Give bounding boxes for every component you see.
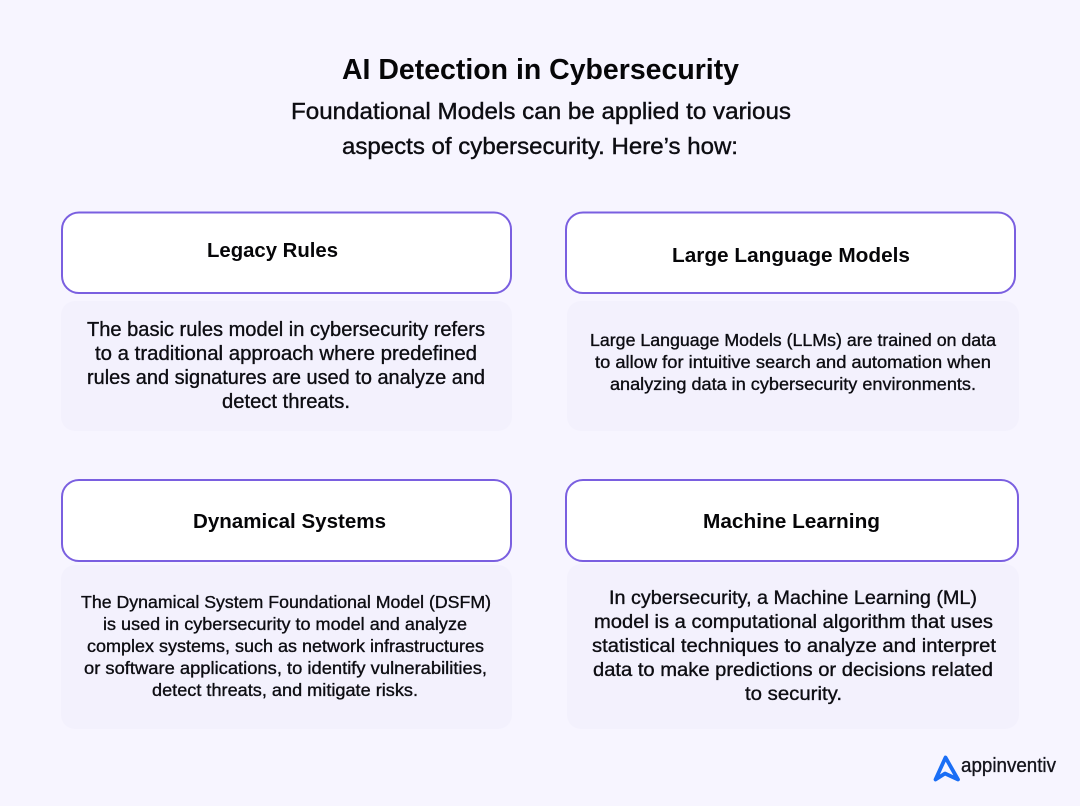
heading box: Dynamical Systems [62,480,511,561]
text block: Dynamical Systems description: is used in cybersecurity to model and analyze [103,614,467,634]
text block: Machine Learning description: In cybersecurity, a Machine Learning (ML) [609,587,977,609]
panel: Dynamical Systems [61,480,512,729]
text block: Machine Learning description: to security. [745,683,842,705]
title: AI Detection in Cybersecurity [342,54,739,86]
panel: Legacy Rules [61,212,512,431]
text block: Dynamical Systems description: or software applications, to identify vulnerabilities, [84,658,487,678]
heading box: Machine Learning: Machine Learning [703,511,880,533]
subtitle: aspects of cybersecurity. Here’s how: [342,133,738,159]
text block: Legacy Rules description: rules and signatures are used to analyze and [87,367,485,389]
logo wordmark: appinventiv [961,755,1056,777]
heading box: Dynamical Systems: Dynamical Systems [193,511,386,533]
text block: Large Language Models description: to allow for intuitive search and automation when [595,352,991,372]
text block: Large Language Models description [567,301,1019,431]
text block: Dynamical Systems description [61,565,512,729]
panel: Large Language Models [566,212,1019,431]
icon: appinventiv arrow mark [936,758,958,780]
text block: Machine Learning description: data to make predictions or decisions related [593,659,993,681]
text block: Dynamical Systems description: complex systems, such as network infrastructures [87,636,484,656]
text block: Machine Learning description: model is a computational algorithm that uses [594,611,993,633]
heading box: Large Language Models [566,212,1015,293]
heading box: Machine Learning [566,480,1018,561]
text block: Dynamical Systems description: The Dynamical System Foundational Model (DSFM) [81,592,491,612]
text block: Large Language Models description: analyzing data in cybersecurity environments. [610,374,976,394]
subtitle: Foundational Models can be applied to various [291,98,791,124]
heading box: Legacy Rules: Legacy Rules [207,240,338,262]
subtitle [291,98,791,159]
text block: Large Language Models description: Large Language Models (LLMs) are trained on data [590,330,996,350]
heading box: Large Language Models: Large Language Models [672,245,910,267]
heading box: Legacy Rules [62,212,511,293]
text block: Legacy Rules description: The basic rules model in cybersecurity refers [87,319,485,341]
text block: Machine Learning description: statistical techniques to analyze and interpret [592,635,997,657]
text block: Machine Learning description [567,564,1019,729]
text block: Dynamical Systems description: detect threats, and mitigate risks. [152,680,418,700]
text block: Legacy Rules description [61,301,512,431]
panel: Machine Learning [566,480,1019,729]
text block: Legacy Rules description: detect threats. [222,391,350,413]
text block: Legacy Rules description: to a traditional approach where predefined [95,343,477,365]
logo: appinventiv [936,755,1056,780]
